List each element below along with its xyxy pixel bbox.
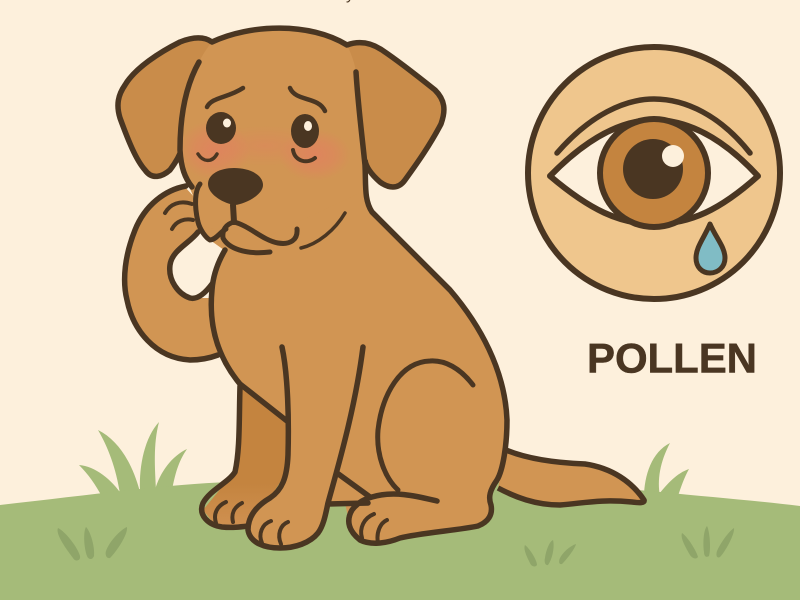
dog hind leg in shadow	[203, 385, 372, 526]
medallion circle	[528, 47, 780, 299]
ground	[0, 480, 800, 600]
hind leg left	[202, 386, 248, 527]
dog outlines	[180, 28, 507, 548]
pupil	[623, 139, 683, 199]
right eye	[291, 114, 319, 148]
toes	[215, 502, 387, 544]
dog raised arm	[125, 186, 218, 360]
belly line	[337, 473, 370, 497]
brows	[207, 88, 243, 107]
grass tufts	[79, 422, 689, 498]
iris	[600, 119, 708, 227]
left eye	[206, 112, 236, 144]
right neck and back	[349, 72, 507, 543]
chest fold	[301, 213, 345, 248]
muzzle left	[196, 184, 226, 240]
front leg lines and paw	[248, 347, 363, 548]
under eye lines	[198, 154, 217, 160]
ground blades	[58, 526, 734, 566]
eyelid arc	[557, 99, 750, 153]
nose bridge line	[233, 205, 234, 222]
thigh	[378, 361, 473, 490]
nose	[208, 168, 263, 205]
left head side	[180, 62, 199, 187]
dog body and head fill	[181, 27, 507, 546]
mouth	[223, 222, 270, 253]
label: POLLEN: POLLEN	[587, 335, 757, 382]
blush	[178, 120, 351, 181]
head top outline	[212, 28, 347, 45]
tear drop	[696, 224, 725, 273]
dog right ear	[347, 43, 444, 187]
highlight	[662, 145, 684, 167]
eye medallion	[528, 47, 780, 299]
dog head fill over ears	[181, 28, 366, 240]
dog tail	[498, 450, 644, 505]
neck left and chest	[211, 250, 287, 421]
eye white	[550, 120, 758, 224]
dog face	[196, 88, 345, 253]
dog left ear	[118, 38, 212, 176]
